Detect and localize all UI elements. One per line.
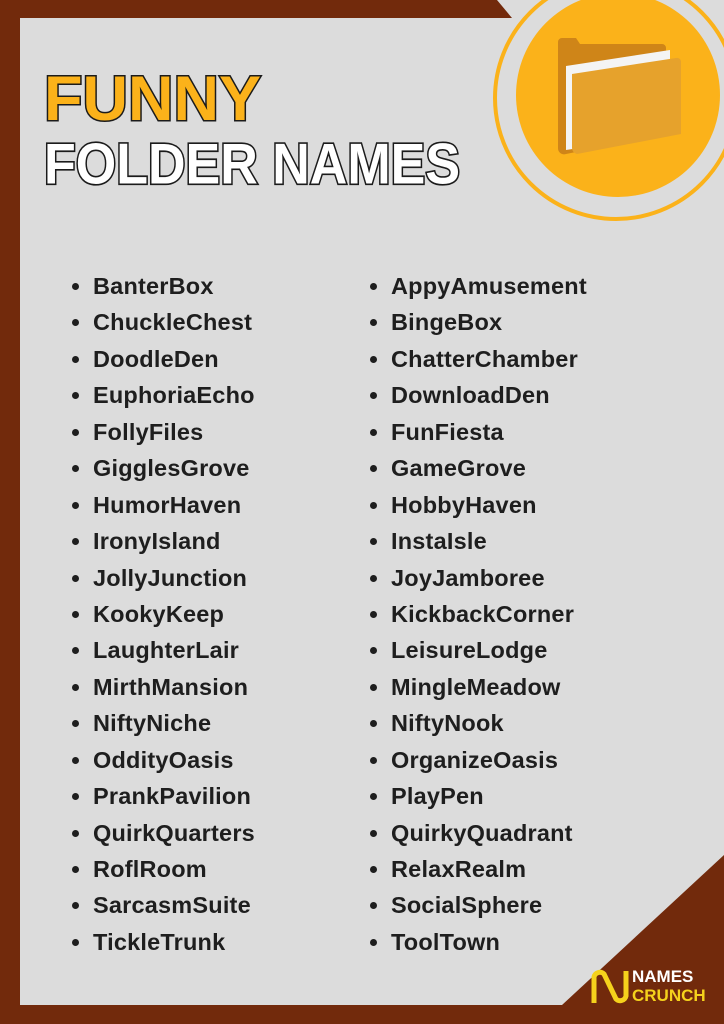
list: left column: BanterBox bbox=[93, 273, 214, 299]
logo bbox=[592, 967, 706, 1005]
list: right column: KickbackCorner bbox=[391, 601, 574, 627]
list: right column: DownloadDen bbox=[391, 382, 550, 408]
title: FUNNY bbox=[44, 64, 261, 134]
list: left column: MirthMansion bbox=[93, 674, 248, 700]
list: right column: QuirkyQuadrant bbox=[391, 820, 573, 846]
list: left column: KookyKeep bbox=[93, 601, 224, 627]
list: right column: OrganizeOasis bbox=[391, 747, 558, 773]
list: right column: HobbyHaven bbox=[391, 492, 537, 518]
list: left column: JollyJunction bbox=[93, 564, 247, 590]
list: left column: EuphoriaEcho bbox=[93, 382, 255, 408]
list: left column: LaughterLair bbox=[93, 637, 239, 663]
list: right column: ChatterChamber bbox=[391, 346, 578, 372]
list: right column: JoyJamboree bbox=[391, 564, 545, 590]
list: right column: InstaIsle bbox=[391, 528, 487, 554]
list: left column bbox=[72, 273, 255, 955]
title: FOLDER NAMES bbox=[44, 133, 460, 196]
icon: folder circle bbox=[495, 0, 724, 219]
list: right column: BingeBox bbox=[391, 309, 502, 335]
list: right column: LeisureLodge bbox=[391, 637, 547, 663]
list: left column: QuirkQuarters bbox=[93, 820, 255, 846]
list: left column: NiftyNiche bbox=[93, 710, 211, 736]
list: right column: ToolTown bbox=[391, 929, 500, 955]
list: right column: RelaxRealm bbox=[391, 856, 526, 882]
list: left column: FollyFiles bbox=[93, 419, 203, 445]
title bbox=[44, 64, 460, 196]
list: left column: ChuckleChest bbox=[93, 309, 252, 335]
list: left column: PrankPavilion bbox=[93, 783, 251, 809]
list: right column: AppyAmusement bbox=[391, 273, 587, 299]
list: left column: SarcasmSuite bbox=[93, 892, 251, 918]
list: left column: DoodleDen bbox=[93, 346, 219, 372]
list: left column: TickleTrunk bbox=[93, 929, 225, 955]
list: left column: IronyIsland bbox=[93, 528, 221, 554]
list: right column: PlayPen bbox=[391, 783, 484, 809]
logo: NAMES bbox=[632, 967, 693, 986]
list: left column: HumorHaven bbox=[93, 492, 241, 518]
logo: CRUNCH bbox=[632, 986, 706, 1005]
list: left column: RoflRoom bbox=[93, 856, 207, 882]
list: right column: GameGrove bbox=[391, 455, 526, 481]
list: right column: FunFiesta bbox=[391, 419, 504, 445]
list: right column bbox=[370, 273, 587, 955]
list: left column: OddityOasis bbox=[93, 747, 234, 773]
list: right column: MingleMeadow bbox=[391, 674, 561, 700]
list: left column: GigglesGrove bbox=[93, 455, 250, 481]
list: right column: SocialSphere bbox=[391, 892, 542, 918]
list: right column: NiftyNook bbox=[391, 710, 504, 736]
